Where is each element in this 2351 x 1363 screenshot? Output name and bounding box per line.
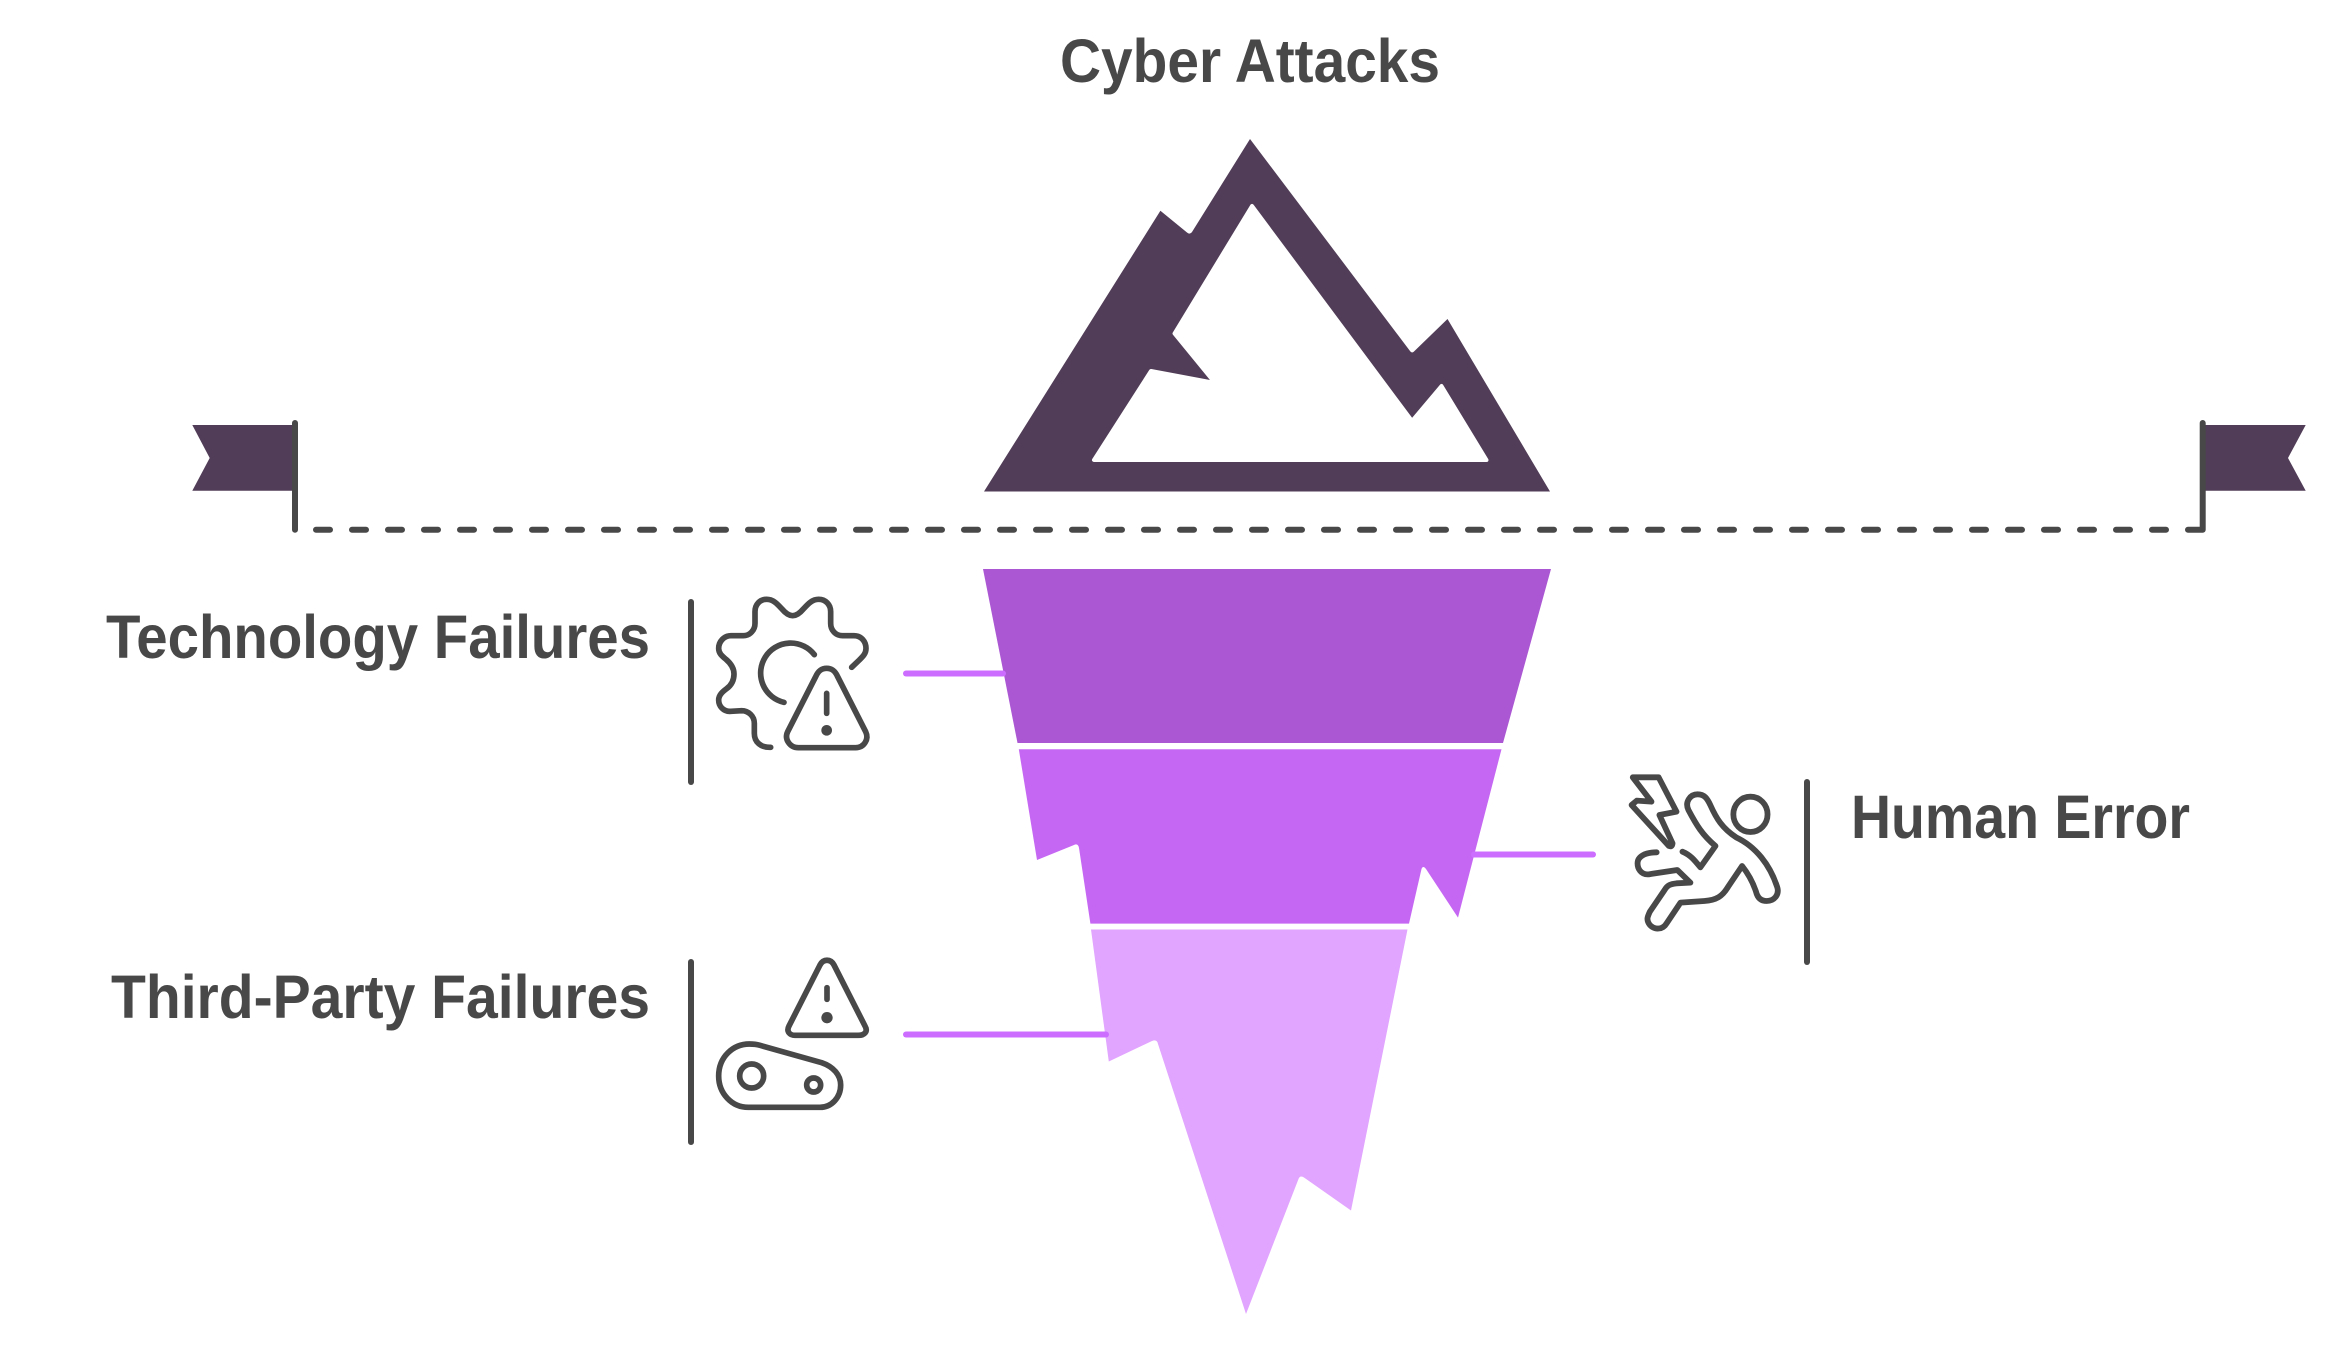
icon: person falling with lightning	[1632, 777, 1778, 929]
divider: Human Error	[1804, 782, 1810, 962]
left flag	[192, 423, 295, 530]
label: Third-Party Failures: Third-Party Failures	[111, 963, 650, 1031]
connector: Human Error	[1474, 852, 1593, 858]
iceberg layer: Third-Party Failures	[1091, 930, 1408, 1314]
icon: gear with warning	[719, 599, 867, 748]
iceberg layer: Technology Failures	[983, 569, 1551, 743]
right flag	[2188, 423, 2306, 530]
iceberg tip: mountain	[984, 139, 1550, 492]
icon: belt drive with warning	[719, 960, 866, 1107]
iceberg layer: Human Error	[1019, 749, 1502, 924]
connector: Third-Party Failures	[906, 1032, 1106, 1038]
divider: Technology Failures	[688, 602, 694, 782]
title: Cyber Attacks: Cyber Attacks	[1060, 27, 1440, 95]
connector: Technology Failures	[906, 670, 1003, 676]
divider: Third-Party Failures	[688, 962, 694, 1142]
waterline: dashed line	[316, 527, 2170, 533]
label: Technology Failures: Technology Failures	[106, 603, 650, 671]
label: Human Error: Human Error	[1851, 783, 2190, 851]
